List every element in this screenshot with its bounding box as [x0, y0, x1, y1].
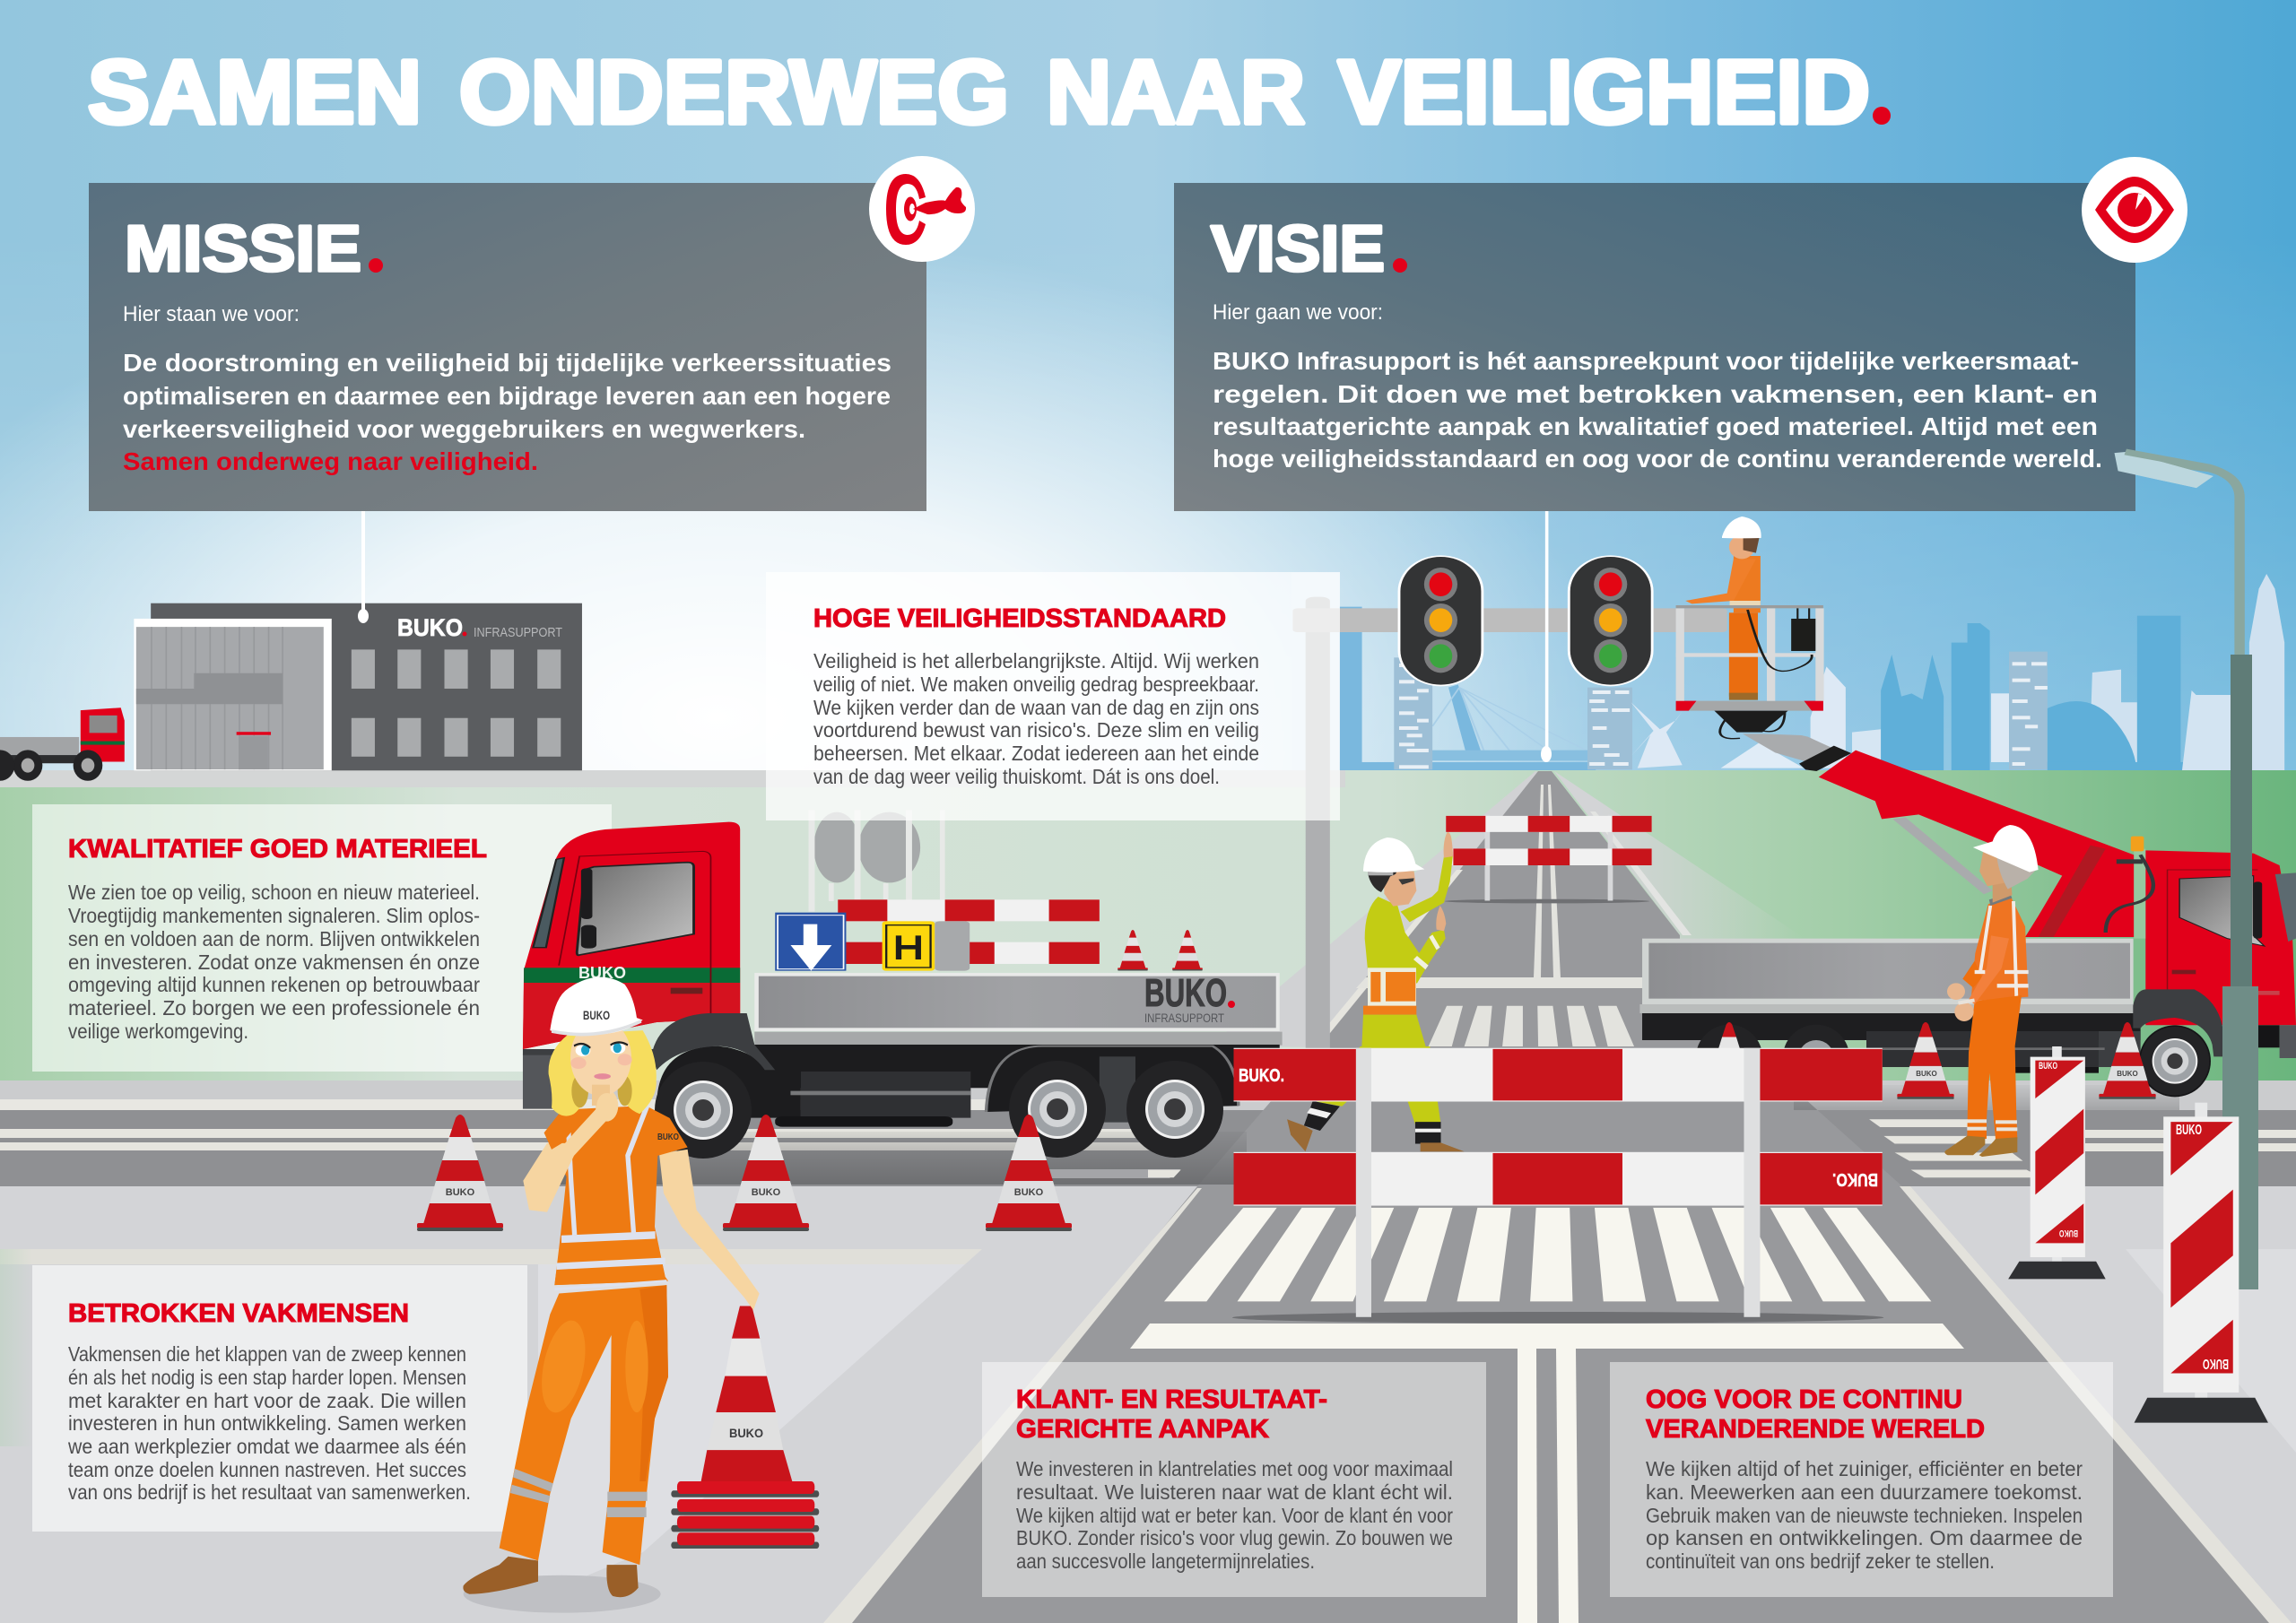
heading: [1646, 1385, 1985, 1444]
barrier beacon small: BUKO: [2039, 1061, 2057, 1072]
shadow: [464, 1575, 661, 1613]
subheading: Hier gaan we voor:: [1213, 300, 1383, 325]
woman in orange with cone stack: BUKO: [729, 1426, 763, 1440]
mission statement: verkeersveiligheid voor weggebruikers en wegwerkers.: [123, 415, 805, 443]
head: [1384, 870, 1416, 907]
small truck far away: [0, 707, 125, 781]
street lamp: [2115, 452, 2258, 1289]
body text: omgeving altijd kunnen rekenen op betrouwbaar: [68, 973, 480, 996]
body text: [1646, 1457, 2083, 1573]
body text: BUKO. Zonder risico's voor vlug gewin. Zo bouwen we: [1016, 1526, 1453, 1549]
traffic light right: [1568, 555, 1654, 686]
body text: kan. Meewerken aan een duurzamere toekomst.: [1646, 1480, 2083, 1504]
worker in orange looking at the crane: [1944, 825, 2039, 1157]
mission statement: Samen onderweg naar veiligheid.: [123, 447, 538, 475]
mission statement: De doorstroming en veiligheid bij tijdelijke verkeerssituaties: [123, 349, 891, 377]
shadow: [1232, 1312, 1883, 1324]
title: ONDERWEG: [459, 42, 1009, 143]
woman in orange with cone stack: BUKO: [657, 1133, 679, 1142]
road markings: crosswalks and stop line: [1130, 1006, 2041, 1623]
body text: Gebruik maken van de nieuwste technieken. Inspelen: [1646, 1504, 2083, 1527]
body text: én als het nodig is een stap harder lopen. Mensen: [68, 1366, 466, 1389]
connector: missie to building: [358, 482, 369, 623]
vision statement: BUKO Infrasupport is hét aanspreekpunt voor tijdelijke verkeersmaat-: [1213, 347, 2079, 375]
face: [570, 1020, 631, 1096]
torso: [544, 1106, 688, 1285]
mission statement: [123, 349, 891, 475]
front wheel arch: [657, 1046, 801, 1118]
building BUKO: BUKO: [397, 614, 463, 641]
barrier beacon small: BUKO: [2059, 1228, 2078, 1238]
icon: eye: [2082, 157, 2187, 263]
big truck with load: BUKO: [578, 964, 626, 982]
panel: kwalitatief goed materieel: [32, 804, 612, 1072]
body text: aan succesvolle langetermijnrelaties.: [1016, 1549, 1315, 1573]
body text: op kansen en ontwikkelingen. Om daarmee de: [1646, 1526, 2083, 1549]
green ground: [0, 770, 2296, 1084]
trousers: [500, 1285, 668, 1565]
cab fender: [2133, 989, 2222, 1056]
body text: Vakmensen die het klappen van de zweep kennen: [68, 1342, 466, 1366]
heading: missie: MISSIE: [125, 213, 361, 285]
vision statement: regelen. Dit doen we met betrokken vakmensen, een klant- en: [1213, 380, 2098, 408]
traffic cones on the road: BUKO: [2117, 1070, 2138, 1078]
body text: voortdurend bewust van risico's. Deze slim en veilig: [813, 718, 1259, 742]
cone stack: [671, 1306, 819, 1549]
vision statement: [1213, 347, 2102, 473]
barrier beacon large: [2135, 1103, 2268, 1423]
fuel tank: [801, 1072, 970, 1118]
title: [88, 42, 1891, 143]
mission statement: optimaliseren en daarmee een bijdrage leveren aan een hogere: [123, 382, 891, 410]
heading: OOG VOOR DE CONTINU: [1646, 1385, 1962, 1414]
traffic cones on the road: BUKO: [1916, 1070, 1937, 1078]
panel: betrokken vakmensen: [32, 1265, 527, 1532]
cab: [523, 822, 740, 1049]
heading: HOGE VEILIGHEIDSSTANDAARD: [813, 604, 1226, 633]
city skyline: [1292, 572, 2284, 771]
building BUKO: INFRASUPPORT: [474, 625, 562, 640]
big truck with load: [523, 810, 1283, 1159]
woman in orange with cone stack: BUKO: [583, 1008, 610, 1022]
body text: [1016, 1457, 1453, 1573]
body text: [68, 881, 480, 1043]
panel: missie: [89, 183, 926, 511]
body text: We kijken altijd of het zuiniger, efficiënter en beter: [1646, 1457, 2083, 1480]
body text: van de dag weer veilig thuiskomt. Dát is ons doel.: [813, 765, 1220, 788]
traffic cones on the road: BUKO: [752, 1187, 781, 1198]
icon: target with dart: [869, 156, 975, 262]
lamp head over visie panel: [2115, 452, 2239, 497]
body text: Vroegtijdig mankementen signaleren. Slim oplos-: [68, 904, 480, 927]
big barrier: BUKO.: [1239, 1066, 1284, 1086]
heading: [1016, 1385, 1327, 1444]
traffic light left: [1398, 555, 1483, 686]
body text: veilige werkomgeving.: [68, 1020, 248, 1043]
panel: visie: [1174, 183, 2135, 511]
heading: BETROKKEN VAKMENSEN: [68, 1299, 409, 1328]
wheels: [655, 1062, 752, 1159]
body text: team onze doelen kunnen nastreven. Het succes: [68, 1458, 466, 1481]
worker in yellow directing traffic: [1287, 832, 1465, 1151]
raised arm: [1401, 855, 1453, 922]
arm left: [523, 1098, 607, 1212]
body text: investeren in hun ontwikkeling. Samen werken: [68, 1411, 466, 1435]
big barrier: [1232, 1048, 1883, 1324]
load: signs and barriers: [775, 810, 1100, 971]
title: VEILIGHEID: [1338, 42, 1870, 143]
body text: van ons bedrijf is het resultaat van samenwerken.: [68, 1480, 471, 1504]
sky background: [0, 0, 2296, 780]
barrier beacon large: BUKO: [2176, 1123, 2202, 1138]
worker in bucket: [1676, 516, 1824, 739]
heading: KLANT- EN RESULTAAT-: [1016, 1385, 1327, 1414]
traffic cones on the road: [417, 1022, 2156, 1231]
building BUKO: [134, 603, 582, 770]
body text: we aan werkplezier omdat we daarmee als één: [67, 1435, 466, 1458]
rear wheels: [1696, 1025, 1762, 1091]
heading: GERICHTE AANPAK: [1016, 1415, 1269, 1444]
title: NAAR: [1047, 42, 1305, 143]
big barrier: BUKO.: [1832, 1169, 1878, 1189]
barrier beacon large: BUKO: [2203, 1356, 2229, 1371]
barrier beacon small: [2008, 1046, 2106, 1279]
panel: oog voor de continu veranderende wereld: [1610, 1362, 2113, 1597]
bed: [754, 1032, 1283, 1046]
big truck with load: INFRASUPPORT: [1144, 1011, 1224, 1025]
body text: [67, 1342, 471, 1504]
cones on truck: [1118, 930, 1203, 970]
body text: We kijken verder dan de waan van de dag en zijn ons: [813, 696, 1259, 719]
distant barrier: [1445, 815, 1652, 903]
body text: sen en voldoen aan de norm. Blijven ontwikkelen: [68, 927, 480, 950]
body text: met karakter en hart voor de zaak. Die willen: [68, 1389, 466, 1412]
body text: Veiligheid is het allerbelangrijkste. Altijd. Wij werken: [813, 649, 1259, 673]
heading: VERANDERENDE WERELD: [1646, 1415, 1985, 1444]
body text: materieel. Zo borgen we een professionele én: [68, 996, 480, 1020]
vision statement: resultaatgerichte aanpak en kwalitatief goed materieel. Altijd met een: [1213, 412, 2098, 440]
body text: continuïteit van ons bedrijf zeker te stellen.: [1646, 1549, 1995, 1573]
hair: [549, 1030, 657, 1116]
heading: visie: VISIE: [1211, 213, 1385, 285]
panel: klant- en resultaatgerichte aanpak: [982, 1362, 1486, 1597]
body text: [813, 649, 1259, 788]
traffic cones on the road: BUKO: [1014, 1187, 1044, 1198]
panel: hoge veiligheidsstandaard: [766, 572, 1340, 820]
hat: [550, 977, 643, 1035]
gantry with traffic lights: [1292, 484, 1727, 1087]
vest: [1368, 968, 1416, 1007]
boots: [463, 1557, 538, 1594]
title: SAMEN: [88, 42, 422, 143]
body text: veilig of niet. We maken onveilig gedrag bespreekbaar.: [813, 673, 1259, 696]
torso: [1365, 897, 1428, 984]
body text: We investeren in klantrelaties met oog voor maximaal: [1016, 1457, 1453, 1480]
vision statement: hoge veiligheidsstandaard en oog voor de continu veranderende wereld.: [1213, 445, 2102, 473]
arm right: [659, 1150, 760, 1310]
big truck with load: BUKO: [1144, 971, 1227, 1015]
body text: en investeren. Zodat onze vakmensen én onze: [68, 950, 480, 974]
subheading: Hier staan we voor:: [123, 302, 300, 326]
body text: resultaat. We luisteren naar wat de klant écht wil.: [1016, 1480, 1453, 1504]
body text: We kijken altijd wat er beter kan. Voor de klant én voor: [1016, 1504, 1453, 1527]
crane truck with boom: [1639, 733, 2296, 1097]
body text: We zien toe op veilig, schoon en nieuw materieel.: [68, 881, 480, 904]
road shoulders: [1210, 771, 1541, 1047]
heading: KWALITATIEF GOED MATERIEEL: [68, 835, 487, 864]
main road surface: [838, 771, 2283, 1623]
woman in orange with cone stack: [463, 977, 819, 1613]
road and sidewalks: [0, 771, 2296, 1623]
body text: beheersen. Met elkaar. Zodat iedereen aan het einde: [813, 742, 1259, 765]
traffic cones on the road: BUKO: [446, 1187, 475, 1198]
connector: visie: [1545, 490, 1548, 753]
